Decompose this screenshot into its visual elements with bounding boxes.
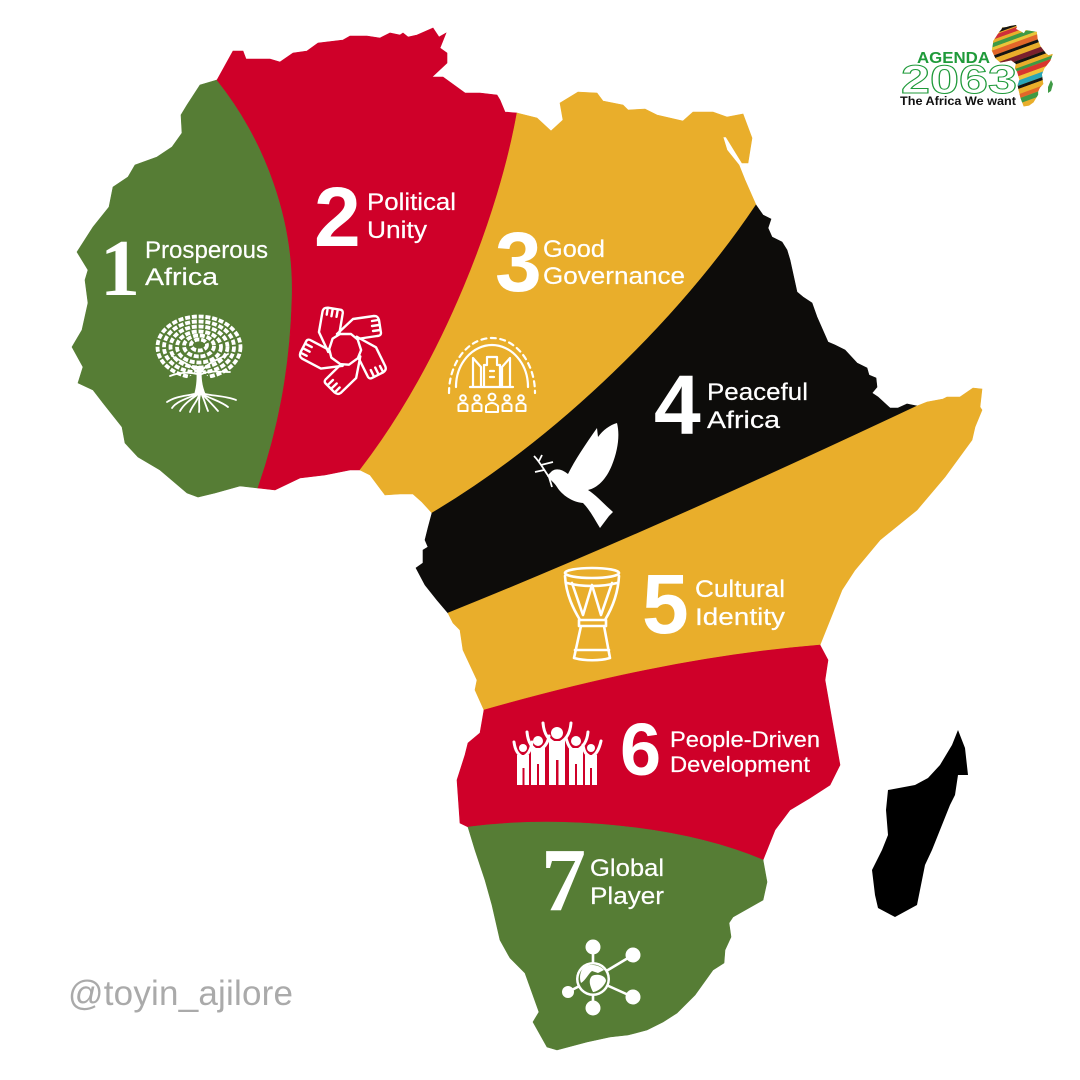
credit: handle: @toyin_ajilore [68,974,293,1013]
label: Good Governance: Governance [543,263,685,290]
logo: mini Madagascar [1048,80,1053,93]
icon: djembe drum [565,568,619,660]
logo: Agenda 2063 [900,25,1053,106]
label: Prosperous Africa [145,237,268,291]
number 5: 5 [642,557,689,651]
label: Political Unity: Unity [367,217,427,244]
panel: 5 Cultural Identity [448,388,982,710]
region: yellow north-east [360,92,756,513]
label: People-Driven Development [670,727,820,777]
panel: 7 Global Player [468,822,767,1050]
region: red north [217,28,517,490]
label: Good Governance: Good [543,236,605,263]
panel: 6 People-Driven Development [457,645,840,860]
region: green south [468,822,767,1050]
number 4: 4 [654,358,701,452]
label: Peaceful Africa [707,379,808,434]
label: Cultural Identity: Identity [695,604,785,631]
region: green west [72,80,292,497]
label: Global Player [590,855,664,910]
icon: government building and citizens [449,338,535,412]
region: red south-central [457,645,840,860]
panel: 1 Prosperous Africa [72,80,292,497]
number 3: 3 [495,215,542,309]
label: Cultural Identity [695,576,785,631]
label: Global Player: Global [590,855,664,882]
panel: 3 Good Governance [360,92,756,513]
label: Political Unity [367,189,456,244]
number 6: 6 [620,708,661,791]
label: Peaceful Africa: Peaceful [707,379,808,406]
label: People-Driven Development: Development [670,752,811,777]
label: Good Governance [543,236,685,290]
label: People-Driven Development: People-Driven [670,727,820,752]
island: Madagascar [872,730,968,917]
number 7: 7 [541,831,586,930]
logo text: The Africa We want: The Africa We want [900,96,1016,108]
icon: group of people with raised arms [514,723,601,785]
icon: five linked hands [296,305,388,397]
label: Political Unity: Political [367,189,456,216]
panel: 2 Political Unity [217,28,517,490]
label: Prosperous Africa: Prosperous [145,237,268,264]
label: Peaceful Africa: Africa [707,407,781,434]
label: Global Player: Player [590,883,664,910]
label: Prosperous Africa: Africa [145,264,219,291]
panel: 4 Peaceful Africa [416,205,917,613]
icon: globe network [562,940,640,1016]
number 1: 1 [100,225,140,313]
logo text: AGENDA: AGENDA [917,50,990,67]
icon: tree [158,316,240,412]
region: yellow central [448,388,982,710]
icon: dove with olive branch [534,423,618,528]
logo text: 2063: 2063 [901,58,1017,102]
number 2: 2 [314,170,361,264]
label: Cultural Identity: Cultural [695,576,785,603]
region: black east [416,205,917,613]
logo: striped mini Africa [992,25,1053,106]
